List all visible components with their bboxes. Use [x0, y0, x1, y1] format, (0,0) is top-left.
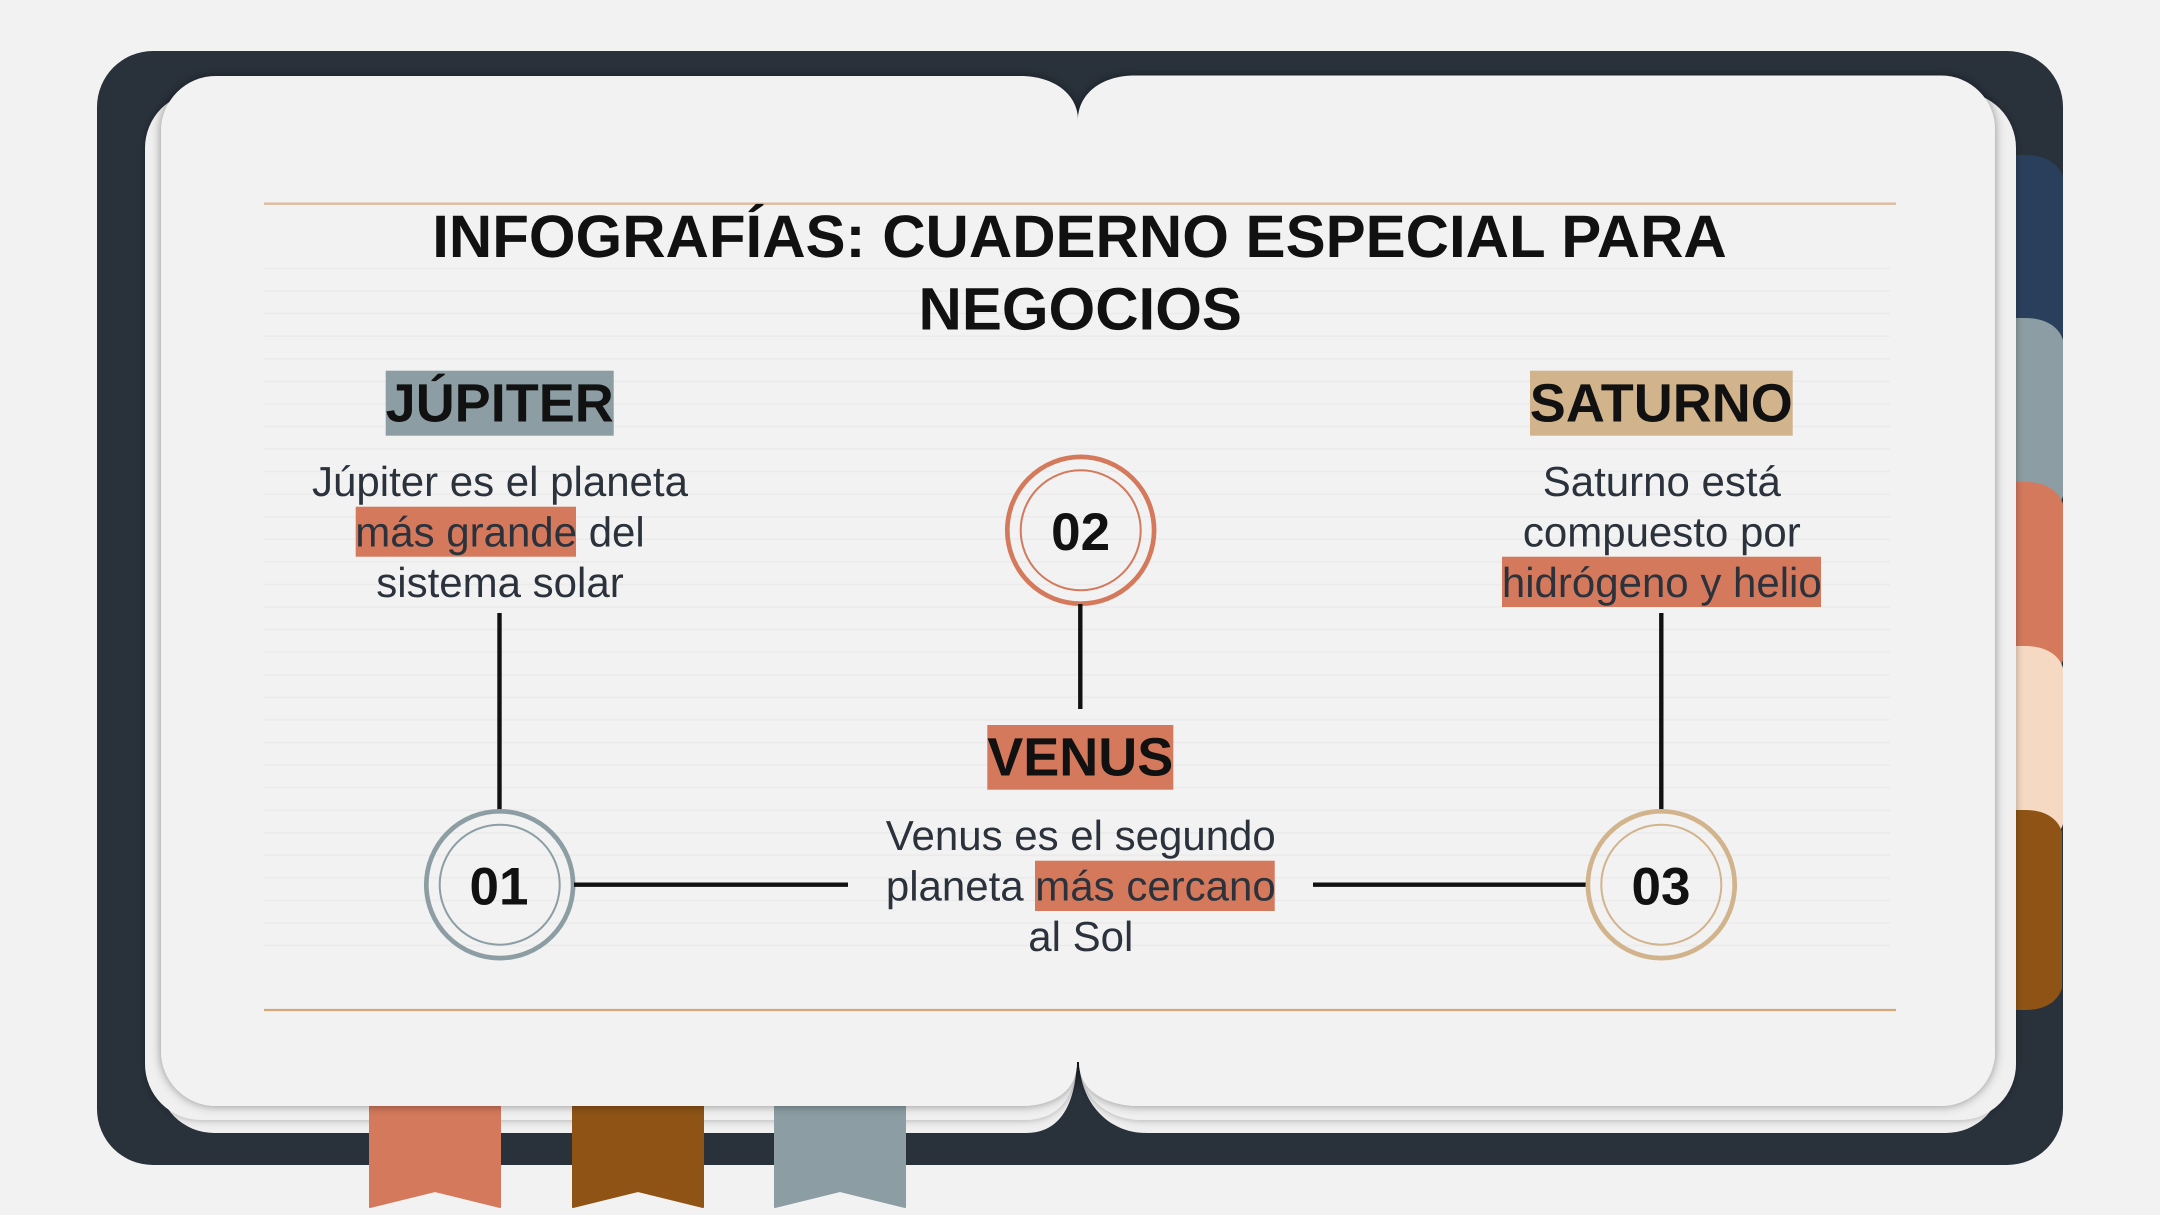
open notebook front pages	[161, 76, 1995, 1106]
tab: orange	[2016, 482, 2063, 682]
connector: Venus to 03	[1313, 883, 1588, 887]
side index tabs	[2016, 155, 2063, 1010]
connector: 02 to Venus	[1078, 604, 1083, 709]
number badge 01: 01	[470, 857, 528, 916]
number badge 03: 03	[1632, 857, 1690, 916]
section: Júpiter text: Júpiter es el planeta	[312, 458, 689, 505]
bookmarks	[370, 1095, 905, 1207]
section: Venus text: Venus es el segundo	[886, 812, 1276, 859]
section: Júpiter text: más grande del	[355, 508, 645, 556]
section: Saturno text: Saturno está	[1543, 458, 1782, 505]
number badge 02	[1007, 457, 1154, 604]
tab: peach	[2016, 646, 2063, 846]
title: NEGOCIOS	[919, 275, 1242, 342]
section: Venus heading: VENUS	[987, 728, 1173, 788]
middle page layer	[145, 92, 2016, 1120]
back page layer	[158, 100, 2002, 1133]
section: Saturno text: hidrógeno y helio	[1502, 559, 1822, 606]
tab: grey	[2016, 318, 2063, 518]
bookmark: grey	[775, 1095, 905, 1207]
bookmark: orange	[370, 1095, 500, 1207]
number badge 03	[1588, 811, 1735, 958]
connector: Saturno to 03	[1659, 613, 1664, 811]
section: Júpiter text	[312, 458, 689, 606]
title: INFOGRAFÍAS: CUADERNO ESPECIAL PARA	[432, 203, 1727, 270]
bookmark: brown	[573, 1095, 703, 1207]
tab: navy	[2016, 155, 2063, 355]
number badge 01	[426, 811, 573, 958]
section: Saturno text	[1502, 458, 1822, 607]
connector: Júpiter to 01	[497, 613, 502, 811]
section: Venus text: al Sol	[1028, 913, 1133, 960]
section: Venus text: planeta más cercano	[886, 862, 1276, 910]
section: Venus text	[886, 812, 1276, 960]
section: Saturno heading: SATURNO	[1530, 374, 1793, 434]
title	[432, 203, 1727, 342]
section: Júpiter text: sistema solar	[376, 559, 624, 606]
number badge 02: 02	[1051, 503, 1110, 562]
section: Saturno text: compuesto por	[1523, 508, 1801, 556]
connector: 01 to Venus	[574, 883, 848, 887]
section: Júpiter heading: JÚPITER	[386, 374, 614, 434]
tab: brown	[2016, 810, 2062, 1010]
